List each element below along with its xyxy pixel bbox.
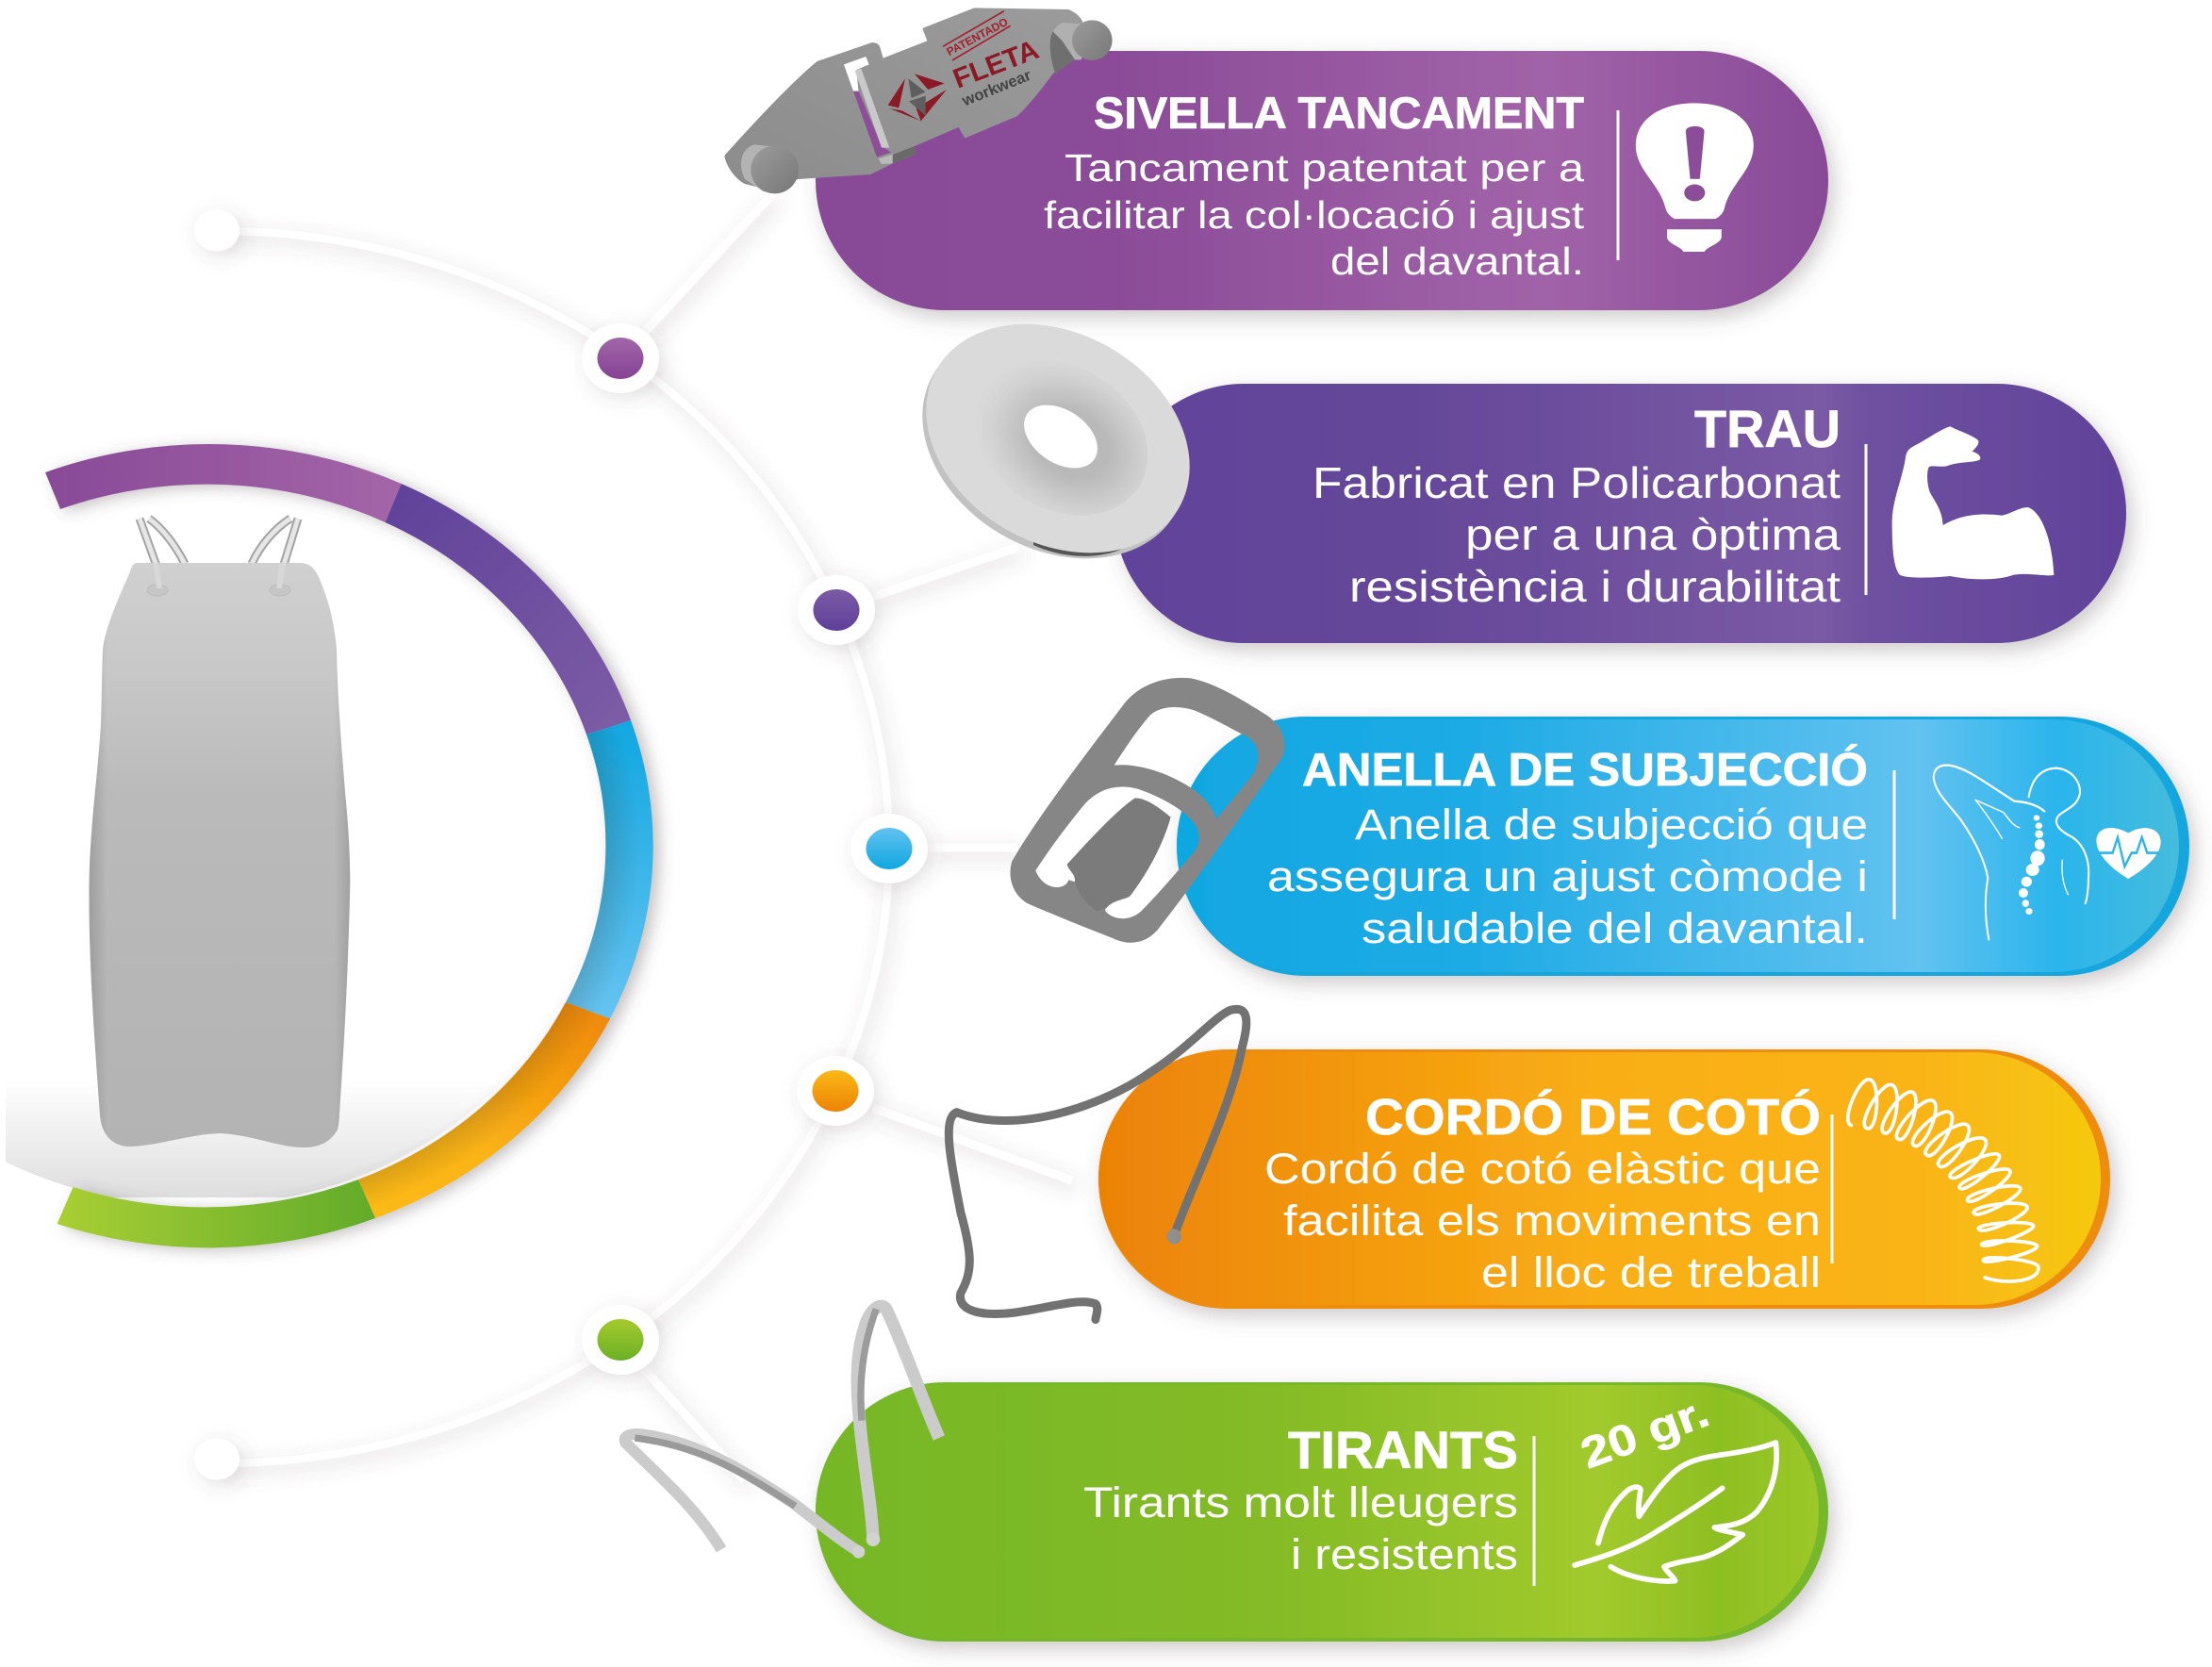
icon: leaf bbox=[1575, 1443, 1776, 1581]
panel: trau bbox=[1114, 384, 2126, 643]
panel: cordo de coto bbox=[1098, 1049, 2110, 1309]
pill background bbox=[1098, 1049, 2110, 1309]
buckle logo bbox=[888, 11, 1043, 121]
dot: blue bbox=[850, 814, 928, 883]
ring: green bbox=[58, 1180, 375, 1247]
right strap bbox=[857, 1306, 939, 1542]
panel: anella de subjeccio bbox=[1177, 717, 2189, 976]
start node bbox=[194, 209, 239, 251]
product: eyelet disc bbox=[881, 278, 1231, 604]
disc rim shadow bbox=[1033, 539, 1122, 556]
body text: facilita els moviments en bbox=[1283, 1197, 1821, 1245]
buckle logo: PATENTADO bbox=[944, 15, 1010, 58]
disc front bbox=[884, 278, 1231, 599]
heading: SIVELLA TANCAMENT bbox=[1094, 88, 1584, 138]
panel: sivella tancament bbox=[816, 51, 1828, 310]
ring: blue bbox=[566, 720, 653, 1018]
body text: assegura un ajust còmode i bbox=[1267, 852, 1868, 900]
timeline curve bbox=[219, 193, 1072, 1480]
disc bevel bbox=[945, 328, 1177, 547]
body text: resistència i durabilitat bbox=[1349, 562, 1841, 611]
product: buckle bbox=[724, 8, 1113, 193]
body text: saludable del davantal. bbox=[1362, 904, 1868, 952]
disc hole bbox=[1013, 392, 1109, 481]
disc edge bbox=[881, 284, 1228, 604]
apron illustration bbox=[89, 519, 350, 1147]
icon: light bulb bbox=[1636, 103, 1754, 252]
body text bbox=[1267, 800, 1868, 952]
clip tab bbox=[1067, 798, 1171, 912]
dot: indigo bbox=[798, 575, 875, 645]
body text bbox=[1044, 146, 1585, 283]
product: cotton cord bbox=[949, 1009, 1246, 1320]
apron eyelets bbox=[147, 585, 290, 596]
ring: purple bbox=[45, 444, 402, 522]
heading: CORDÓ DE COTÓ bbox=[1365, 1089, 1821, 1146]
buckle body bbox=[724, 8, 1082, 189]
pill background bbox=[816, 51, 1828, 310]
heading: TIRANTS bbox=[1288, 1420, 1518, 1479]
heading: ANELLA DE SUBJECCIÓ bbox=[1302, 744, 1868, 796]
product: ring clip bbox=[1010, 678, 1285, 943]
apron body bbox=[89, 563, 350, 1147]
buckle rollers bbox=[741, 20, 1113, 193]
buckle slot bbox=[844, 57, 916, 164]
body text: per a una òptima bbox=[1465, 510, 1841, 559]
body text: Cordó de cotó elàstic que bbox=[1264, 1145, 1821, 1193]
icon: 20 gr label: 20 gr. bbox=[1575, 1387, 1715, 1477]
ring: orange bbox=[358, 1002, 610, 1218]
ring segments bbox=[45, 444, 653, 1247]
dot: purple bbox=[582, 323, 659, 393]
icon: spring bbox=[1848, 1080, 2039, 1281]
pill background bbox=[1177, 717, 2189, 976]
end node bbox=[194, 1439, 239, 1480]
pill background bbox=[816, 1382, 1828, 1642]
strap end caps bbox=[852, 1532, 880, 1559]
body text: i resistents bbox=[1291, 1530, 1518, 1578]
icon: back and heart bbox=[1934, 766, 2161, 939]
buckle logo: FLETA bbox=[949, 34, 1043, 95]
panel: tirants bbox=[816, 1382, 1828, 1642]
icon: flexed arm bbox=[1892, 426, 2054, 579]
body text: el lloc de treball bbox=[1481, 1248, 1821, 1296]
body text: facilitar la col·locació i ajust bbox=[1044, 193, 1585, 237]
product: shoulder straps bbox=[625, 1306, 939, 1559]
dot: green bbox=[582, 1305, 659, 1375]
buckle logo: workwear bbox=[959, 66, 1034, 110]
body text: Tirants molt lleugers bbox=[1083, 1478, 1518, 1527]
ring: indigo bbox=[386, 484, 631, 734]
body text: Fabricat en Policarbonat bbox=[1312, 458, 1841, 507]
body text: Tancament patentat per a bbox=[1065, 146, 1584, 190]
body text bbox=[1264, 1145, 1821, 1296]
body text bbox=[1312, 458, 1841, 611]
floor shadow under apron bbox=[6, 1108, 473, 1197]
body text bbox=[1083, 1478, 1518, 1578]
body text: Anella de subjecció que bbox=[1355, 800, 1868, 849]
left strap bbox=[625, 1434, 860, 1552]
dot: orange bbox=[797, 1056, 874, 1126]
heading: TRAU bbox=[1694, 399, 1841, 458]
apron straps bbox=[140, 519, 298, 568]
pill background bbox=[1114, 384, 2126, 643]
body text: del davantal. bbox=[1330, 239, 1584, 283]
